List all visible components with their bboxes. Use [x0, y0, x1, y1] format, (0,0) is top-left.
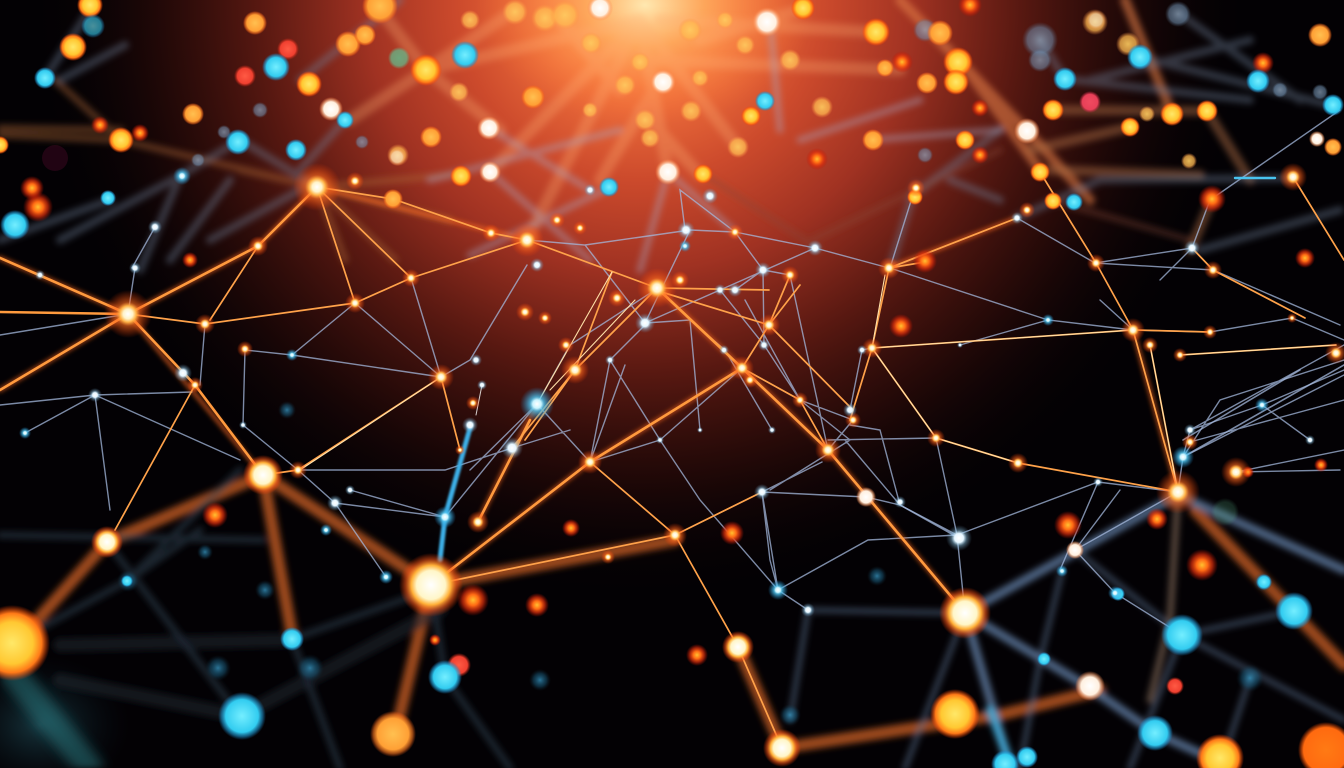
mid-focus blue-grey web: [0, 110, 1344, 635]
orange bokeh discs, upper area: [0, 0, 1342, 210]
out-of-focus upper mesh: [0, 0, 1340, 270]
out-of-focus lower connections: [0, 470, 1344, 768]
large foreground nodes: [0, 163, 1344, 768]
bright orange connection lines: [0, 172, 1344, 748]
small white and blue junction nodes: [19, 167, 1315, 617]
red blurred dots: [20, 91, 1328, 695]
blue bright line: [440, 178, 1275, 560]
pale and white bokeh discs, upper area: [319, 0, 1325, 185]
